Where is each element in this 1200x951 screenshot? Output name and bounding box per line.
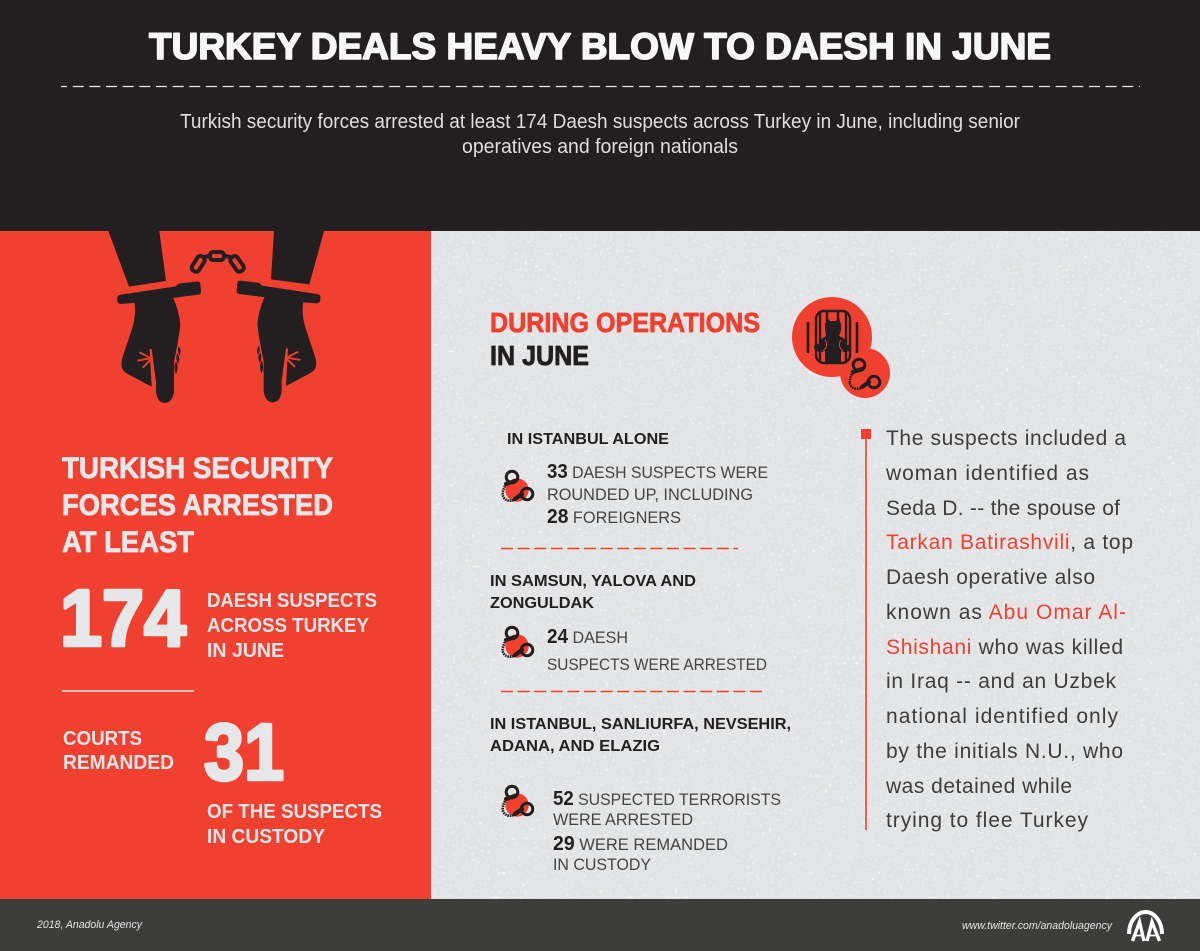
label: courts remanded (63, 728, 174, 774)
callout: suspects description: The suspects included a (886, 427, 1126, 450)
text block: Samsun, Yalova and Zonguldak (490, 573, 767, 674)
detail: 33 suspects: 28 FOREIGNERS (547, 506, 681, 528)
subtitle (180, 111, 1020, 158)
detail: 52 arrested, 29 remanded (553, 788, 781, 874)
heading: during operations in June (490, 307, 760, 371)
callout: suspects description: Shishani who was killed (886, 636, 1123, 659)
label: of the suspects in custody: OF THE SUSPECTS (207, 801, 382, 823)
detail: 52 arrested, 29 remanded: WERE ARRESTED (553, 810, 693, 829)
heading: arrested at least: FORCES ARRESTED (62, 489, 333, 522)
icon: prisoner and handcuffs (792, 297, 890, 398)
subtitle: operatives and foreign nationals (462, 136, 738, 158)
icon: handcuffs on red dot (503, 471, 533, 502)
label: of the suspects in custody: IN CUSTODY (207, 826, 326, 848)
icon: broken handcuffs (108, 231, 324, 403)
text block: Istanbul, Sanliurfa, Nevsehir, Adana and Elazig (490, 716, 791, 874)
callout: suspects description: in Iraq -- and an Uzbek (886, 670, 1116, 693)
label: Daesh suspects across Turkey in June: IN JUNE (207, 640, 284, 662)
icon: handcuffs on red dot (503, 627, 533, 658)
icon: Anadolu Agency logo (1129, 912, 1162, 941)
panel: red statistics panel (0, 231, 431, 899)
callout: suspects description: known as Abu Omar Al- (886, 601, 1126, 624)
label: courts remanded: COURTS (63, 728, 142, 750)
footer (0, 899, 1200, 951)
callout: suspects description: Daesh operative also (886, 566, 1095, 589)
callout: suspects description: woman identified as (885, 462, 1089, 485)
callout: suspects description: Seda D. -- the spouse of (886, 497, 1120, 520)
subtitle: Turkish security forces arrested at least 174 Daesh suspects across Turkey in June, including senior (180, 111, 1020, 133)
label: courts remanded: REMANDED (63, 752, 174, 774)
credit: 2018, Anadolu Agency (36, 919, 143, 931)
label: of the suspects in custody (207, 801, 382, 848)
detail: 24 suspects: 24 DAESH (547, 626, 628, 648)
heading: arrested at least (62, 452, 333, 559)
detail: 52 arrested, 29 remanded: 29 WERE REMANDED (553, 833, 728, 855)
number: 31: 31 (204, 708, 284, 796)
title: TURKEY DEALS HEAVY BLOW TO DAESH IN JUNE (149, 26, 1051, 67)
heading: arrested at least: TURKISH SECURITY (62, 452, 333, 485)
header band (0, 0, 1200, 231)
text block: Istanbul alone: IN ISTANBUL ALONE (507, 431, 669, 448)
callout: suspects description: by the initials N.U., who (886, 740, 1123, 763)
callout: suspects description: Tarkan Batirashvili, a top (886, 531, 1133, 554)
detail: 33 suspects (547, 461, 768, 528)
heading: during operations in June: DURING OPERATIONS (490, 307, 760, 338)
detail: 52 arrested, 29 remanded: IN CUSTODY (553, 855, 651, 874)
heading: during operations in June: IN JUNE (490, 340, 589, 371)
callout: suspects description: trying to flee Turkey (886, 809, 1088, 832)
callout: suspects description: was detained while (885, 775, 1072, 798)
detail: 24 suspects: SUSPECTS WERE ARRESTED (547, 655, 767, 674)
label: Daesh suspects across Turkey in June (207, 590, 377, 662)
callout: suspects description: national identified only (886, 705, 1118, 728)
heading: arrested at least: AT LEAST (62, 526, 194, 559)
number: 174: 174 (60, 574, 186, 662)
callout: suspects description (861, 427, 1133, 832)
text block: Istanbul alone (503, 431, 768, 528)
detail: 33 suspects: ROUNDED UP, INCLUDING (547, 485, 753, 504)
detail: 24 suspects (547, 626, 767, 674)
icon: handcuffs on red dot (503, 786, 533, 817)
label: Daesh suspects across Turkey in June: DAESH SUSPECTS (207, 590, 377, 612)
detail: 52 arrested, 29 remanded: 52 SUSPECTED TERRORISTS (553, 788, 781, 810)
text block: Istanbul, Sanliurfa, Nevsehir, Adana and Elazig: IN ISTANBUL, SANLIURFA, NEVSEHIR, (490, 716, 791, 733)
text block: Samsun, Yalova and Zonguldak: ZONGULDAK (490, 595, 594, 612)
detail: 33 suspects: 33 DAESH SUSPECTS WERE (547, 461, 768, 483)
panel: grey operations panel (431, 231, 1200, 899)
text block: Samsun, Yalova and Zonguldak: IN SAMSUN, YALOVA AND (490, 573, 696, 590)
text block: Istanbul, Sanliurfa, Nevsehir, Adana and Elazig: ADANA, AND ELAZIG (490, 738, 660, 755)
website: www.twitter.com/anadoluagency (962, 920, 1113, 932)
label: Daesh suspects across Turkey in June: ACROSS TURKEY (207, 615, 370, 637)
